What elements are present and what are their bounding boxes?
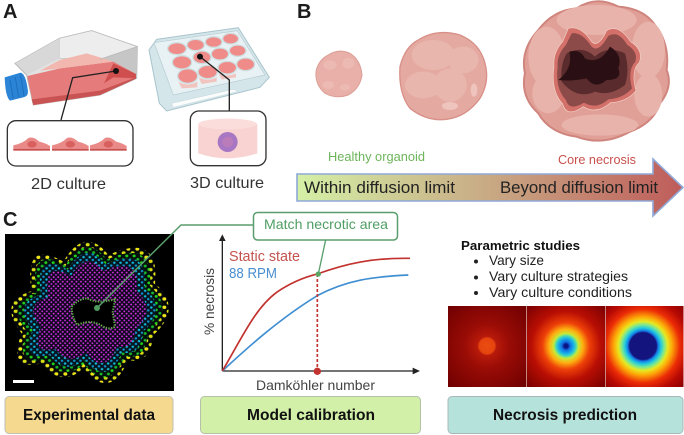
medium healthy organoid: [400, 33, 487, 120]
arrow text: within: Within diffusion limit: [304, 179, 455, 197]
y axis label: % necrosis: [201, 268, 217, 335]
text block: parametric studies: Vary culture conditions: [489, 284, 632, 300]
chart legend: 88 RPM: 88 RPM: [229, 266, 277, 282]
red curve: [222, 258, 410, 371]
label box: necrosis prediction: [448, 396, 683, 434]
chart legend: static state: Static state: [229, 249, 300, 265]
arrow: diffusion limit gradient: [297, 159, 683, 216]
panel label B: B: [297, 1, 311, 23]
label box: necrosis prediction: Necrosis prediction: [493, 407, 637, 424]
necrotic core: [553, 28, 641, 112]
callout: match necrotic area: Match necrotic area: [264, 216, 388, 232]
icon: well plate: [149, 28, 269, 111]
heatmaps: necrosis prediction: [448, 306, 684, 387]
callout line: flask to 2D cells: [61, 68, 119, 120]
large organoid with core necrosis: [524, 1, 669, 141]
label: 2D culture: 2D culture: [31, 176, 106, 193]
dotted guide: [315, 274, 320, 371]
callout: match necrotic area: [254, 212, 398, 240]
text block: parametric studies: Vary size: [489, 252, 544, 268]
label box: experimental data: [5, 396, 173, 434]
icon: culture flask: [5, 31, 137, 105]
callout line: plate to 3D culture: [197, 54, 229, 111]
label box: model calibration: Model calibration: [247, 407, 375, 424]
green connector: necrotic area to model box: [94, 225, 254, 311]
x axis label: Damköhler number: [256, 377, 375, 393]
text block: parametric studies: Parametric studies: [461, 238, 580, 253]
text block: parametric studies: [461, 238, 632, 300]
inset: 2D cells: [7, 121, 133, 166]
label: healthy organoid: Healthy organoid: [328, 149, 425, 164]
label: 3D culture: 3D culture: [190, 175, 264, 192]
arrow text: beyond: Beyond diffusion limit: [500, 179, 658, 197]
label box: model calibration: [200, 396, 420, 434]
small healthy organoid: [316, 51, 362, 97]
panel label C: C: [3, 209, 17, 231]
label box: experimental data: Experimental data: [23, 407, 155, 424]
microscopy image: [5, 234, 174, 391]
panel label A: A: [3, 1, 17, 23]
blue curve: [222, 275, 408, 371]
chart: necrosis vs Damkohler number: [219, 234, 420, 375]
inset: 3D culture: [190, 111, 266, 166]
text block: parametric studies: Vary culture strategies: [489, 268, 628, 284]
label: core necrosis: Core necrosis: [558, 152, 636, 167]
